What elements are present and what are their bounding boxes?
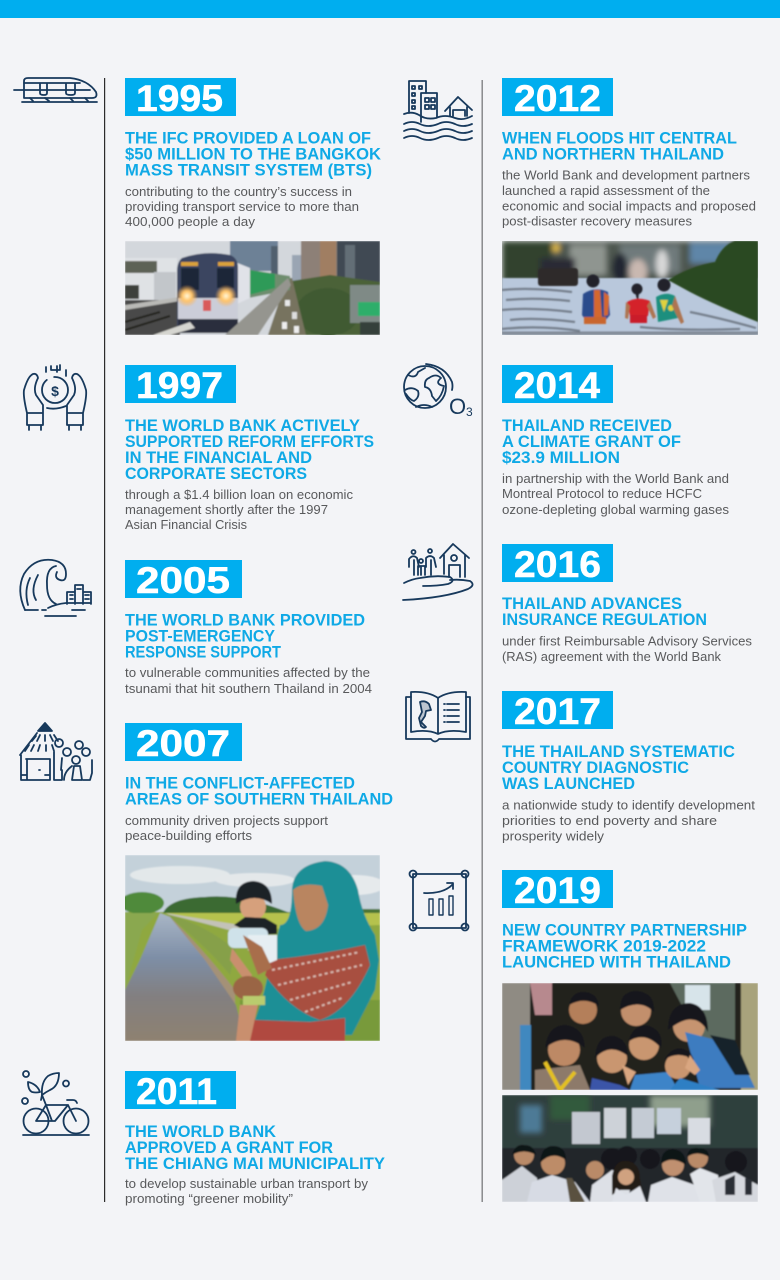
top bar — [0, 0, 780, 18]
heading 2016: THAILAND ADVANCES — [502, 595, 682, 613]
heading 2016 — [502, 595, 707, 629]
heading 2014: $23.9 MILLION — [502, 449, 620, 467]
icon: flooded buildings — [404, 81, 472, 140]
photo: schoolchildren — [502, 983, 758, 1090]
heading 2014: THAILAND RECEIVED — [502, 417, 672, 435]
icon: train — [14, 78, 97, 102]
heading 1995: MASS TRANSIT SYSTEM (BTS) — [125, 162, 372, 180]
heading 2014 — [502, 417, 681, 467]
body 1995: 400,000 people a day — [125, 214, 256, 229]
icon: globe and ozone: O — [449, 394, 466, 419]
heading 2019 — [502, 922, 747, 972]
panel: 1995 — [14, 77, 381, 336]
body 2012: launched a rapid assessment of the — [502, 183, 710, 198]
heading 2019: FRAMEWORK 2019-2022 — [502, 938, 706, 956]
body 2011 — [125, 1176, 368, 1206]
heading 1997 — [125, 417, 374, 483]
heading 2014: A CLIMATE GRANT OF — [502, 433, 681, 451]
body 2014: Montreal Protocol to reduce HCFC — [502, 486, 702, 501]
photo: mother and baby — [120, 855, 385, 1041]
body 2017: prosperity widely — [502, 828, 605, 844]
panel: 1997 — [24, 364, 374, 532]
heading 1995: $50 MILLION TO THE BANGKOK — [125, 146, 381, 164]
body 1995: contributing to the country’s success in — [125, 184, 352, 199]
heading 2005: RESPONSE SUPPORT — [125, 644, 281, 662]
heading 2017: WAS LAUNCHED — [502, 775, 635, 793]
body 2007: community driven projects support — [125, 813, 328, 828]
body 1995: providing transport service to more than — [125, 199, 359, 214]
panel: 2017 — [406, 690, 755, 844]
body 1997 — [125, 487, 353, 532]
heading 1997: IN THE FINANCIAL AND — [125, 449, 312, 467]
heading 2017 — [502, 743, 735, 793]
body 2017 — [502, 798, 755, 844]
year badge 2012: 2012 — [514, 77, 601, 119]
year badge 2011: 2011 — [136, 1070, 217, 1112]
body 2005 — [125, 665, 372, 696]
body 2012 — [502, 168, 756, 228]
icon: hands holding coin — [24, 365, 86, 430]
body 2005: to vulnerable communities affected by the — [125, 665, 370, 680]
body 1997: through a $1.4 billion loan on economic — [125, 487, 353, 502]
year badge 1995: 1995 — [136, 77, 223, 119]
year badge 2016: 2016 — [514, 543, 601, 585]
heading 2011 — [125, 1123, 385, 1173]
icon: globe and ozone: 3 — [466, 405, 473, 419]
photo: high school students — [502, 1095, 758, 1202]
icon: hand holding family and house — [403, 544, 473, 600]
body 2007 — [125, 813, 328, 843]
icon: tsunami wave — [20, 560, 91, 616]
panel: 2007 — [20, 722, 393, 1041]
heading 1997: SUPPORTED REFORM EFFORTS — [125, 433, 374, 451]
year badge 2005: 2005 — [136, 559, 230, 601]
body 2017: priorities to end poverty and share — [502, 813, 717, 828]
heading 2005: POST-EMERGENCY — [125, 628, 275, 646]
body 2016 — [502, 634, 752, 664]
heading 2011: THE CHIANG MAI MUNICIPALITY — [125, 1155, 385, 1173]
photo: skytrain — [125, 241, 380, 336]
body 2007: peace-building efforts — [125, 828, 252, 843]
heading 2005 — [125, 612, 365, 662]
heading 2007: IN THE CONFLICT-AFFECTED — [125, 774, 355, 792]
year badge 2019: 2019 — [514, 869, 601, 911]
body 2012: the World Bank and development partners — [502, 168, 751, 182]
heading 2017: COUNTRY DIAGNOSTIC — [502, 759, 689, 777]
heading 2011: APPROVED A GRANT FOR — [125, 1139, 333, 1157]
year badge 1997: 1997 — [136, 364, 223, 406]
heading 2019: NEW COUNTRY PARTNERSHIP — [502, 922, 747, 940]
panel: 2011 — [22, 1070, 385, 1206]
heading 2005: THE WORLD BANK PROVIDED — [125, 612, 365, 630]
body 2016: under first Reimbursable Advisory Services — [502, 634, 752, 648]
body 1997: management shortly after the 1997 — [125, 502, 328, 517]
icon: globe and ozone — [404, 364, 473, 419]
heading 2012 — [502, 130, 737, 164]
photo: children in flood — [502, 241, 758, 335]
panel: 2005 — [20, 559, 372, 696]
panel: 2014 — [404, 364, 729, 517]
left timeline line — [104, 78, 105, 1202]
body 2012: post-disaster recovery measures — [502, 214, 692, 228]
heading 2019: LAUNCHED WITH THAILAND — [502, 954, 731, 972]
heading 1997: CORPORATE SECTORS — [125, 465, 307, 483]
heading 2007 — [125, 774, 393, 808]
year badge 2014: 2014 — [514, 364, 600, 406]
body 1997: Asian Financial Crisis — [125, 517, 247, 532]
body 2017: a nationwide study to identify development — [502, 798, 755, 812]
icon: book with Thailand map — [406, 692, 470, 742]
icon: framed chart — [410, 870, 468, 930]
heading 2012: AND NORTHERN THAILAND — [502, 146, 724, 164]
heading 2011: THE WORLD BANK — [125, 1123, 276, 1141]
heading 1997: THE WORLD BANK ACTIVELY — [125, 417, 360, 435]
heading 2012: WHEN FLOODS HIT CENTRAL — [502, 130, 737, 148]
year badge 2007: 2007 — [136, 722, 230, 764]
heading 1995 — [125, 130, 381, 180]
year badge 2017: 2017 — [514, 690, 601, 732]
heading 2016: INSURANCE REGULATION — [502, 611, 707, 629]
right timeline line — [482, 80, 483, 1202]
heading 2017: THE THAILAND SYSTEMATIC — [502, 743, 735, 761]
body 2011: promoting “greener mobility” — [125, 1191, 293, 1206]
body 2012: economic and social impacts and proposed — [502, 198, 756, 214]
body 2011: to develop sustainable urban transport by — [125, 1176, 368, 1191]
body 2014: in partnership with the World Bank and — [502, 471, 729, 486]
body 1995 — [125, 184, 359, 229]
panel: 2016 — [403, 543, 752, 664]
heading 2007: AREAS OF SOUTHERN THAILAND — [125, 790, 393, 808]
body 2014 — [502, 471, 729, 517]
icon: hut and family — [20, 723, 92, 780]
body 2005: tsunami that hit southern Thailand in 2004 — [125, 681, 372, 696]
icon: hands holding coin: $ — [51, 383, 59, 399]
body 2014: ozone-depleting global warming gases — [502, 502, 729, 517]
heading 1995: THE IFC PROVIDED A LOAN OF — [125, 130, 371, 148]
panel: 2019 — [410, 869, 758, 1202]
body 2016: (RAS) agreement with the World Bank — [502, 649, 721, 664]
panel: 2012 — [404, 77, 758, 335]
icon: bicycle with leaves — [22, 1071, 89, 1135]
